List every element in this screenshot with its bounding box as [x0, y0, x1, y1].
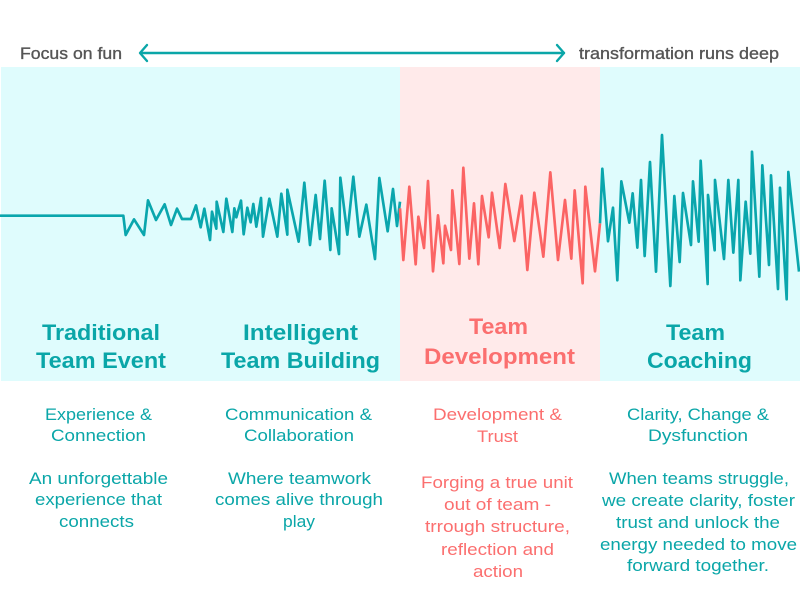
heading: Team Coaching: Team — [666, 320, 725, 345]
heading: Intelligent Team Building: Team Building — [221, 348, 380, 373]
description: intelligent team building — [215, 469, 383, 531]
subheading: Communication & Collaboration: Communication & — [225, 405, 373, 424]
subheading: Experience & Connection: Experience & — [45, 405, 153, 424]
description: team coaching: we create clarity, foster — [601, 491, 795, 510]
description: team development: Forging a true unit — [421, 473, 573, 492]
subheading: Development & Trust: Development & — [433, 405, 563, 424]
description: intelligent team building: Where teamwork — [228, 469, 372, 488]
subheading: Experience & Connection — [45, 405, 153, 445]
arrow: double-headed spectrum — [140, 45, 564, 61]
heading: Intelligent Team Building — [221, 320, 380, 373]
label: focus on fun: Focus on fun — [20, 44, 122, 63]
description: team development — [421, 473, 573, 581]
heading: Team Development: Development — [424, 344, 576, 369]
label: transformation runs deep: transformation runs deep — [579, 44, 779, 63]
subheading: Experience & Connection: Connection — [51, 426, 146, 445]
chart: teal waveform, team coaching section — [600, 135, 799, 299]
description: team coaching — [600, 469, 797, 575]
description: traditional team event: experience that — [35, 490, 162, 509]
subheading: Development & Trust — [433, 405, 563, 446]
subheading: Clarity, Change & Dysfunction — [627, 405, 770, 445]
chart: red waveform, team development section — [400, 168, 600, 283]
subheading: Clarity, Change & Dysfunction: Dysfunction — [648, 426, 748, 445]
description: team development: reflection and — [441, 540, 554, 559]
description: traditional team event — [29, 469, 168, 531]
description: traditional team event: connects — [59, 512, 134, 531]
panel: teal background right — [600, 67, 800, 381]
chart: teal waveform, left section — [0, 177, 400, 259]
description: intelligent team building: play — [283, 512, 316, 531]
heading: Team Development: Team — [469, 314, 528, 339]
heading: Intelligent Team Building: Intelligent — [243, 320, 359, 345]
subheading: Communication & Collaboration: Collaboration — [244, 426, 354, 445]
heading: Traditional Team Event: Traditional — [42, 320, 160, 345]
description: team coaching: forward together. — [627, 556, 769, 575]
panel: teal background left — [1, 67, 400, 381]
description: team coaching: When teams struggle, — [609, 469, 789, 488]
description: team development: trrough structure, — [425, 517, 570, 536]
description: team coaching: trust and unlock the — [616, 513, 780, 532]
description: intelligent team building: comes alive through — [215, 490, 383, 509]
subheading: Clarity, Change & Dysfunction: Clarity, Change & — [627, 405, 770, 424]
description: team development: out of team - — [444, 495, 551, 514]
description: team development: action — [473, 562, 523, 581]
heading: Team Coaching: Coaching — [647, 348, 752, 373]
heading: Traditional Team Event — [36, 320, 167, 373]
subheading: Communication & Collaboration — [225, 405, 373, 445]
panel: team development background — [400, 67, 600, 381]
description: traditional team event: An unforgettable — [29, 469, 168, 488]
description: team coaching: energy needed to move — [600, 535, 797, 554]
heading: Team Development — [424, 314, 576, 369]
heading: Traditional Team Event: Team Event — [36, 348, 167, 373]
heading: Team Coaching — [647, 320, 752, 373]
subheading: Development & Trust: Trust — [477, 427, 518, 446]
